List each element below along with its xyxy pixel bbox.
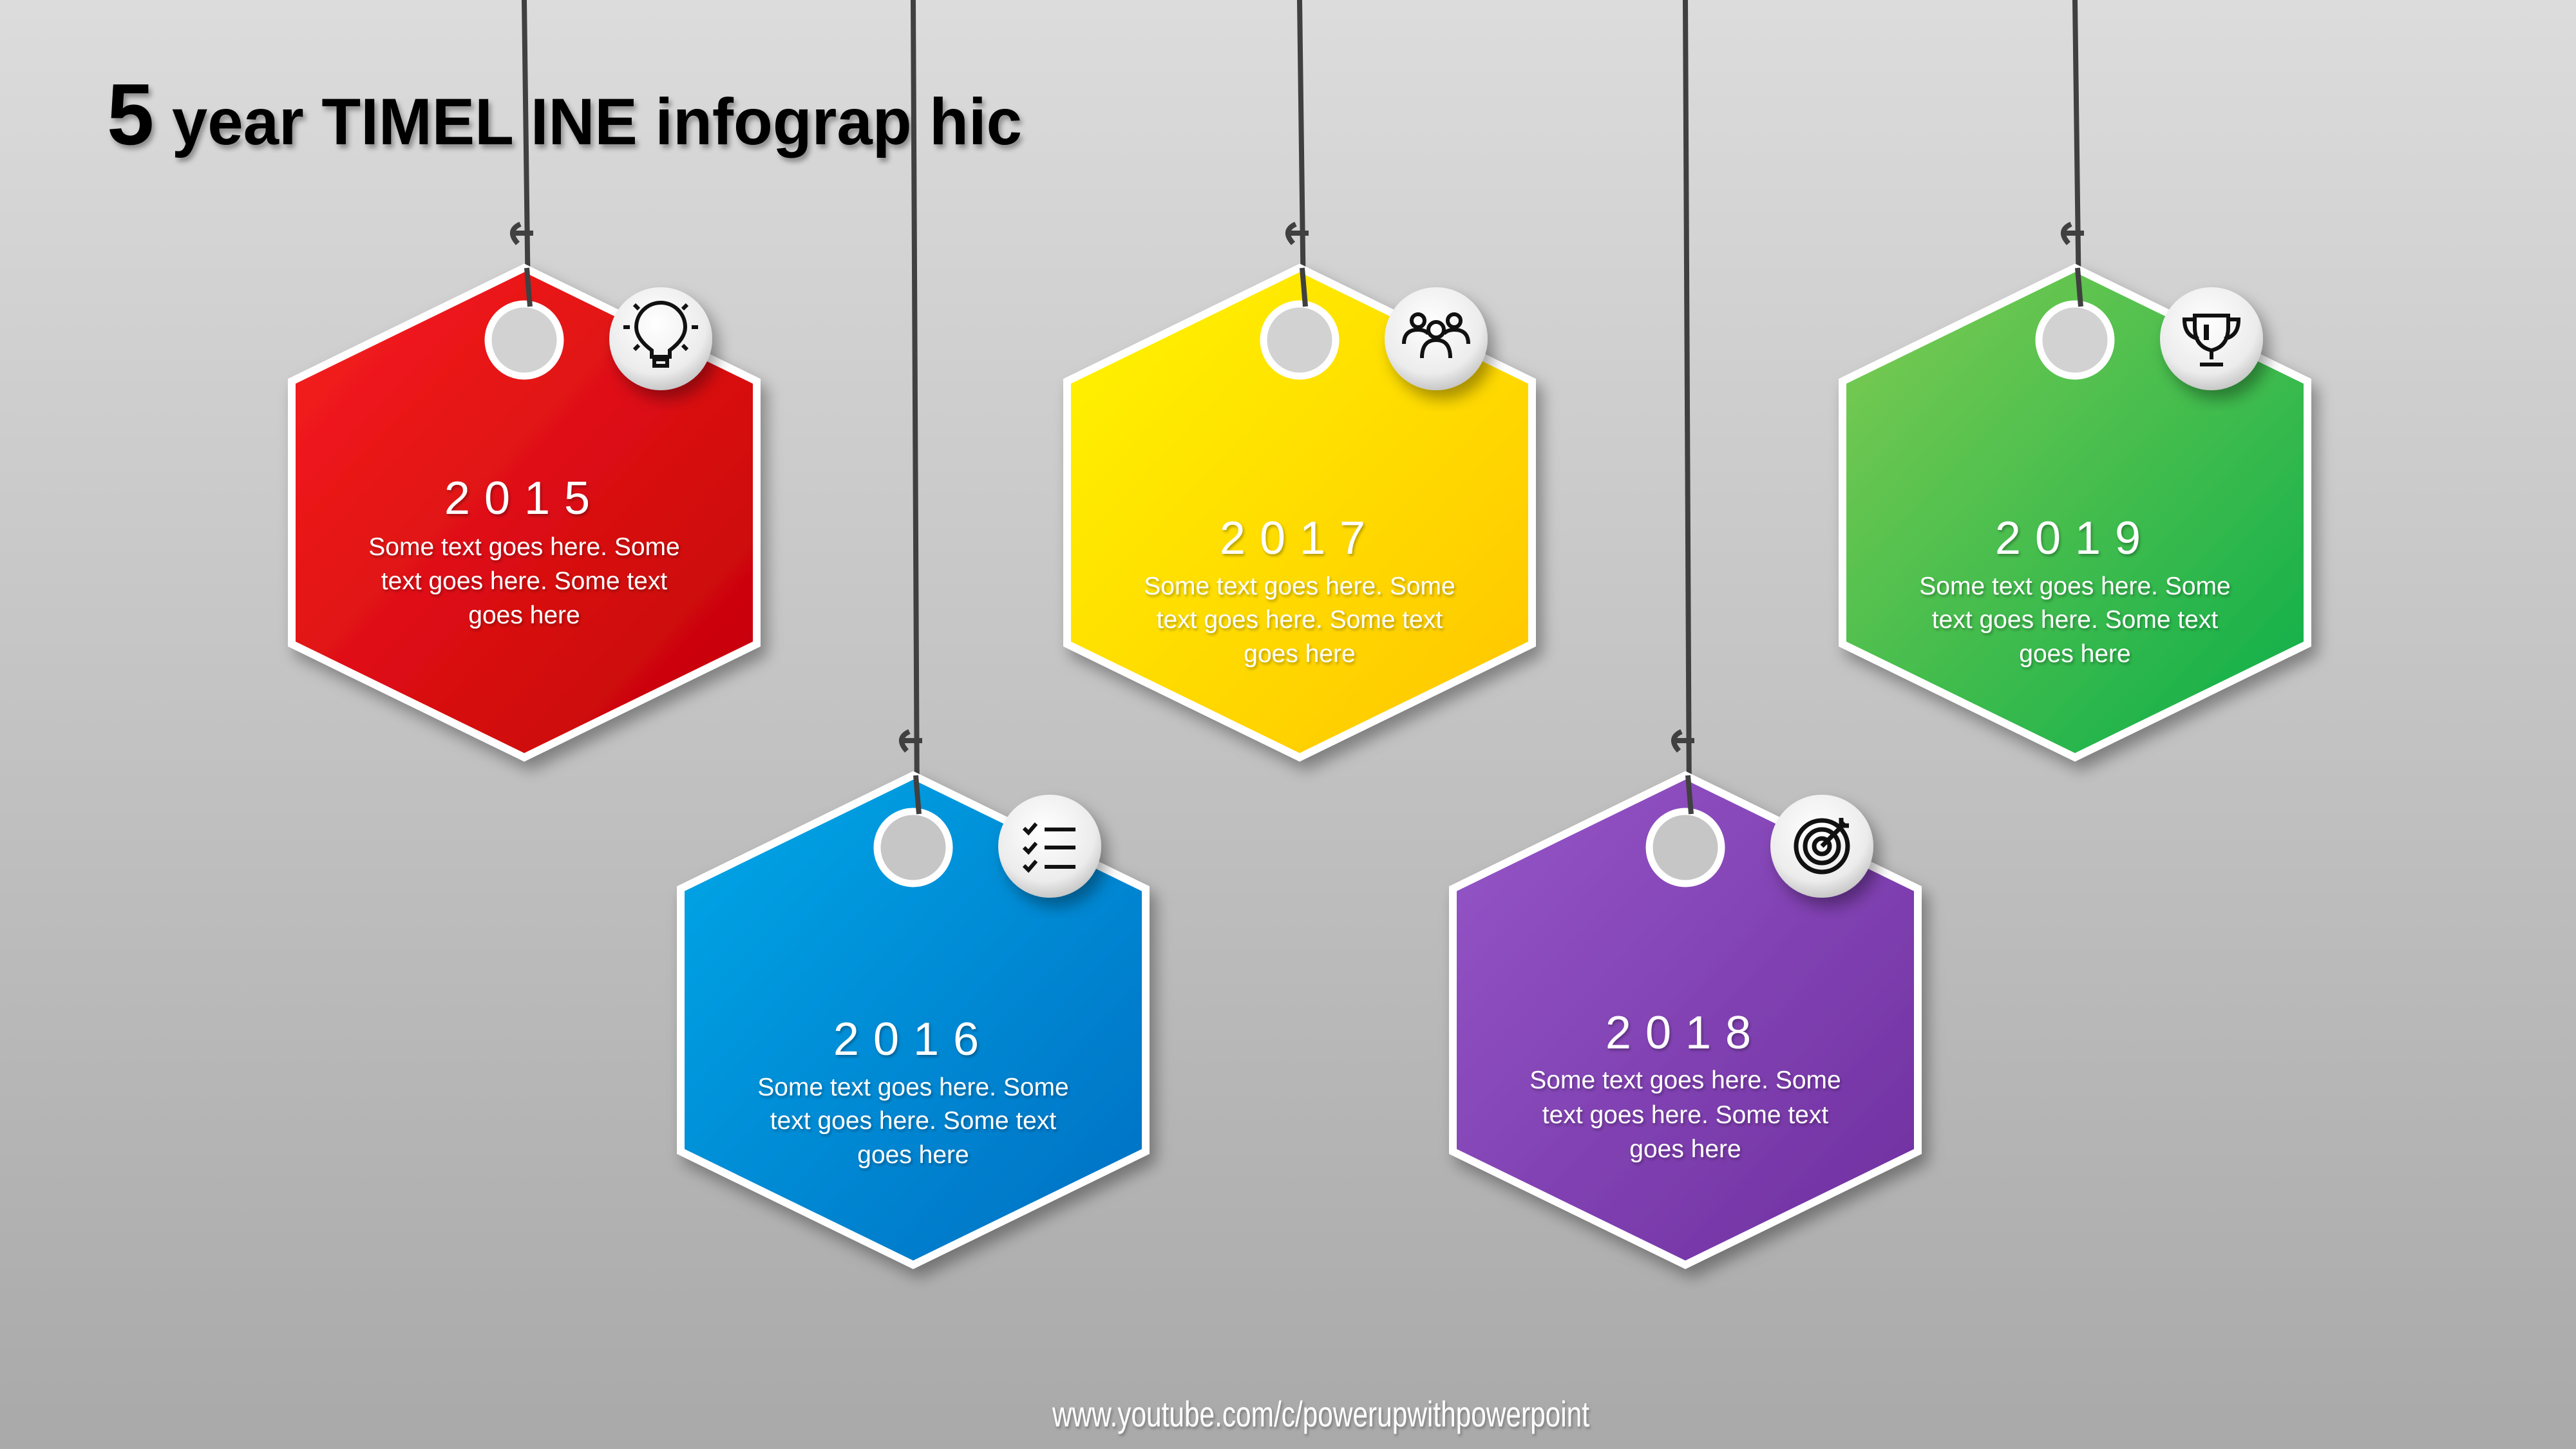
text 2016: Some text goes here. Some <box>757 1074 1069 1101</box>
hexagon 2017 <box>1067 268 1532 757</box>
panel: 2017 <box>1067 268 1532 757</box>
text 2018: goes here <box>1629 1135 1741 1163</box>
year 2018: 2018 <box>1605 1007 1765 1059</box>
text 2018: Some text goes here. Some <box>1530 1066 1841 1094</box>
text 2015: Some text goes here. Some <box>368 533 680 561</box>
string: 2015 <box>513 0 533 303</box>
text 2016: text goes here. Some text <box>770 1107 1056 1135</box>
text 2019: text goes here. Some text <box>1932 606 2218 634</box>
text 2017: text goes here. Some text <box>1157 606 1443 634</box>
panel: 2018 <box>1453 775 1918 1265</box>
text 2017: goes here <box>1244 640 1356 668</box>
text 2019: goes here <box>2019 640 2131 668</box>
year 2019: 2019 <box>1995 513 2155 564</box>
hole 2016 <box>877 811 949 884</box>
panel: 2016 <box>681 775 1146 1265</box>
title: 5 year TIMEL INE infograp hic <box>107 66 1022 163</box>
hexagon 2018 <box>1453 775 1918 1265</box>
footer url: www.youtube.com/c/powerupwithpowerpoint <box>1052 1394 1589 1434</box>
panel: 2019 <box>1842 268 2307 757</box>
hexagon 2019 <box>1842 268 2307 757</box>
hole 2019 <box>2039 304 2111 376</box>
string: 2016 <box>902 0 922 810</box>
text 2015: goes here <box>468 601 580 629</box>
text 2019: Some text goes here. Some <box>1919 573 2231 600</box>
hexagon 2015 <box>292 268 757 757</box>
text 2017: Some text goes here. Some <box>1144 573 1455 600</box>
icon: target <box>1770 795 1873 898</box>
hole 2017 <box>1264 304 1336 376</box>
hole 2018 <box>1649 811 1721 884</box>
panel: 2015 <box>292 268 757 757</box>
hexagon 2016 <box>681 775 1146 1265</box>
text 2018: text goes here. Some text <box>1542 1101 1828 1129</box>
icon: people <box>1385 287 1488 390</box>
year 2016: 2016 <box>833 1014 993 1065</box>
string: 2018 <box>1674 0 1694 810</box>
hole 2015 <box>488 304 560 376</box>
text 2015: text goes here. Some text <box>381 567 667 595</box>
icon: trophy <box>2160 287 2263 390</box>
year 2015: 2015 <box>444 473 604 524</box>
icon: checklist <box>998 795 1101 898</box>
year 2017: 2017 <box>1220 513 1379 564</box>
text 2016: goes here <box>857 1141 969 1169</box>
string: 2019 <box>2063 0 2084 303</box>
icon: lightbulb <box>609 287 712 390</box>
string: 2017 <box>1288 0 1309 303</box>
